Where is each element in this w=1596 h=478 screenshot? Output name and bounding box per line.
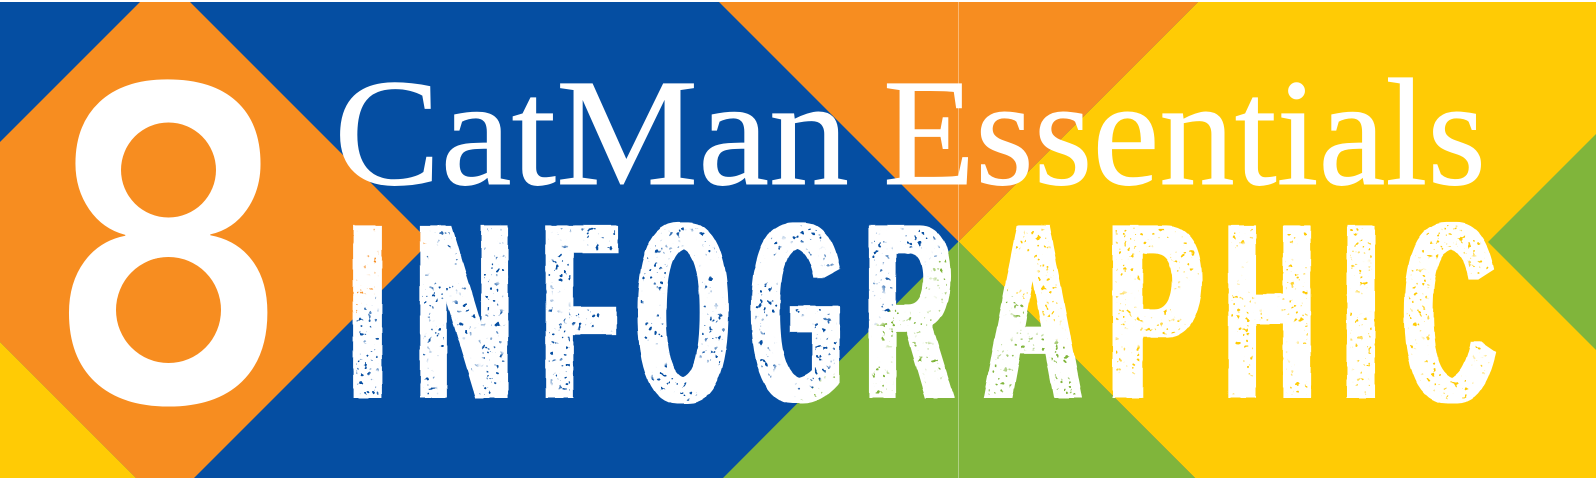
background: orange diamond xyxy=(0,2,430,478)
heading: INFOGRAPHIC distressed letters: H xyxy=(1225,171,1314,451)
background: yellow corner triangle xyxy=(0,342,136,478)
title: CatMan Essentials: Essentials xyxy=(883,49,1486,218)
heading: INFOGRAPHIC distressed letters: I xyxy=(1344,172,1378,452)
heading: INFOGRAPHIC distressed letters: O xyxy=(637,183,729,476)
heading: INFOGRAPHIC distressed letters: R xyxy=(866,171,952,452)
heading: INFOGRAPHIC distressed letters: P xyxy=(1108,172,1202,452)
heading: INFOGRAPHIC distressed letters: I xyxy=(349,172,386,452)
background: green right triangle xyxy=(1488,134,1596,350)
heading: INFOGRAPHIC distressed letters: N xyxy=(416,171,512,452)
heading: INFOGRAPHIC distressed letters: F xyxy=(542,171,618,451)
heading: INFOGRAPHIC distressed letters: C xyxy=(1403,183,1495,476)
heading: INFOGRAPHIC distressed letters xyxy=(349,171,1495,476)
background: yellow right field xyxy=(958,2,1596,478)
heading: INFOGRAPHIC distressed letters: A xyxy=(985,171,1081,452)
title: CatMan Essentials: CatMan xyxy=(334,49,849,218)
background: orange top triangle xyxy=(719,2,1198,242)
title: CatMan Essentials xyxy=(334,49,1486,218)
heading: INFOGRAPHIC distressed letters: G xyxy=(750,183,842,476)
background: green bottom triangle xyxy=(723,242,1195,478)
